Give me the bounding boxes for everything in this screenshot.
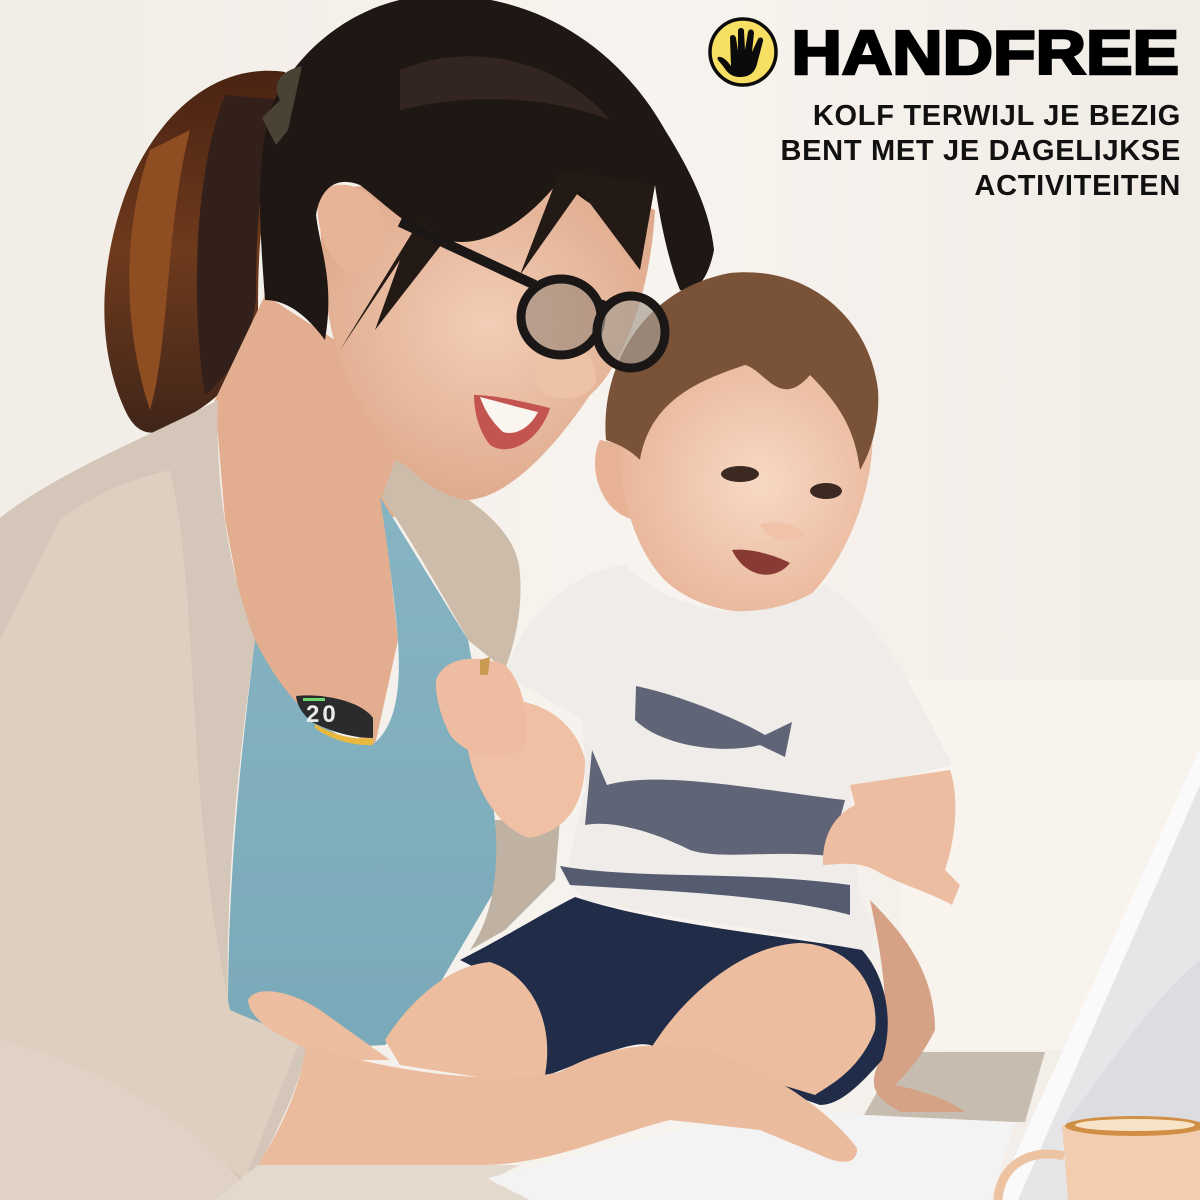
mother: face xyxy=(320,181,655,500)
subtitle text block xyxy=(780,100,1181,202)
icon: yellow hand badge xyxy=(710,19,776,85)
mother: neck and chest xyxy=(215,295,440,745)
title: HANDFREE xyxy=(791,19,1179,88)
subtitle text block: ACTIVITEITEN xyxy=(974,170,1181,202)
baby: whale prints on shirt xyxy=(560,686,850,915)
mother: glasses xyxy=(400,222,665,368)
table xyxy=(215,1165,530,1200)
subtitle text block: BENT MET JE DAGELIJKSE xyxy=(780,135,1181,167)
mother: ear xyxy=(317,185,385,271)
baby: legs xyxy=(248,943,876,1095)
baby: white t-shirt xyxy=(505,565,952,955)
baby: left arm and hand xyxy=(436,657,585,838)
subtitle text block: KOLF TERWIJL JE BEZIG xyxy=(813,100,1181,132)
mother: ponytail xyxy=(104,71,295,433)
mother: hair tie xyxy=(262,66,302,145)
baby: navy shorts xyxy=(460,897,888,1105)
baby: hair xyxy=(605,272,878,470)
mother: hair top xyxy=(260,0,714,350)
device: pump display xyxy=(296,695,373,745)
mother: cardigan xyxy=(0,400,560,1200)
mother: forearm and hand on laptop xyxy=(258,1045,857,1165)
mother: smile xyxy=(474,395,550,449)
device: pump display: 20 xyxy=(306,701,339,728)
baby: eyes, nose and mouth xyxy=(721,466,842,575)
mother: hand behind baby xyxy=(870,900,965,1112)
mother: nose xyxy=(536,350,597,398)
coffee cup xyxy=(998,1116,1200,1200)
laptop xyxy=(488,748,1200,1200)
baby: ear and head xyxy=(595,352,873,612)
baby: right arm and hand xyxy=(823,770,960,905)
mother: blue top xyxy=(228,497,497,1050)
